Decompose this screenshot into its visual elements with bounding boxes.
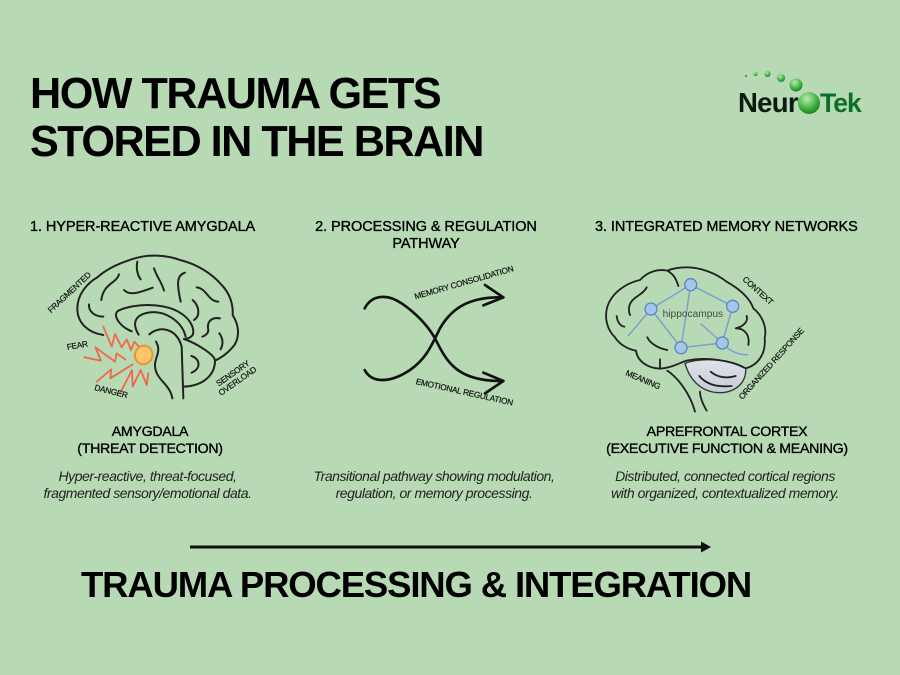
title: STORED IN THE BRAIN bbox=[30, 118, 483, 166]
description: networks: with organized, contextualized memory. bbox=[611, 485, 839, 501]
description: pathway: regulation, or memory processing. bbox=[336, 485, 532, 501]
logo: NeuroTek: Tek bbox=[820, 88, 862, 118]
description: networks bbox=[611, 468, 839, 501]
description: networks: Distributed, connected cortical regions bbox=[615, 468, 835, 484]
description: amygdala bbox=[43, 468, 252, 501]
caption: prefrontal cortex: (EXECUTIVE FUNCTION & MEANING) bbox=[606, 440, 848, 456]
icon: integrated network brain: CONTEXT bbox=[741, 274, 776, 307]
title bbox=[30, 70, 483, 166]
caption: amygdala: AMYGDALA bbox=[112, 424, 188, 440]
heading: processing pathway: PATHWAY bbox=[392, 236, 460, 252]
description: pathway: Transitional pathway showing modulation, bbox=[314, 468, 554, 484]
heading: integrated memory networks: 3. INTEGRATED MEMORY NETWORKS bbox=[595, 219, 858, 235]
caption: prefrontal cortex: APREFRONTAL CORTEX bbox=[647, 424, 807, 440]
heading: processing pathway bbox=[315, 219, 537, 252]
logo: NeuroTek: Neur bbox=[738, 87, 799, 118]
footer heading: TRAUMA PROCESSING & INTEGRATION bbox=[81, 564, 751, 605]
icon: integrated network brain bbox=[605, 266, 806, 413]
labels: FRAGMENTED bbox=[46, 270, 93, 315]
icon: crossing pathways: MEMORY CONSOLIDATION bbox=[413, 263, 515, 301]
caption: prefrontal cortex bbox=[606, 424, 848, 456]
icon: crossing pathways: EMOTIONAL REGULATION bbox=[415, 376, 514, 407]
labels: DANGER bbox=[94, 382, 129, 400]
icon: crossing pathways bbox=[363, 263, 515, 407]
description: amygdala: fragmented sensory/emotional data. bbox=[43, 485, 252, 501]
description: pathway bbox=[314, 468, 554, 501]
labels: SENSORY bbox=[214, 358, 252, 388]
heading: processing pathway: 2. PROCESSING & REGULATION bbox=[315, 219, 537, 235]
icon: integrated network brain: MEANING bbox=[624, 368, 662, 391]
description: amygdala: Hyper-reactive, threat-focused, bbox=[58, 468, 236, 484]
caption: amygdala: (THREAT DETECTION) bbox=[77, 440, 223, 456]
labels bbox=[46, 270, 258, 400]
heading: hyper-reactive amygdala: 1. HYPER-REACTIVE AMYGDALA bbox=[30, 219, 255, 235]
icon: amygdala brain bbox=[46, 254, 258, 400]
icon: integrated network brain: ORGANIZED RESPONSE bbox=[736, 325, 806, 401]
icon: integrated network brain: hippocampus bbox=[663, 309, 723, 320]
labels: FEAR bbox=[66, 338, 89, 352]
title: HOW TRAUMA GETS bbox=[30, 70, 440, 118]
caption: amygdala bbox=[77, 424, 223, 456]
labels: OVERLOAD bbox=[216, 364, 258, 398]
